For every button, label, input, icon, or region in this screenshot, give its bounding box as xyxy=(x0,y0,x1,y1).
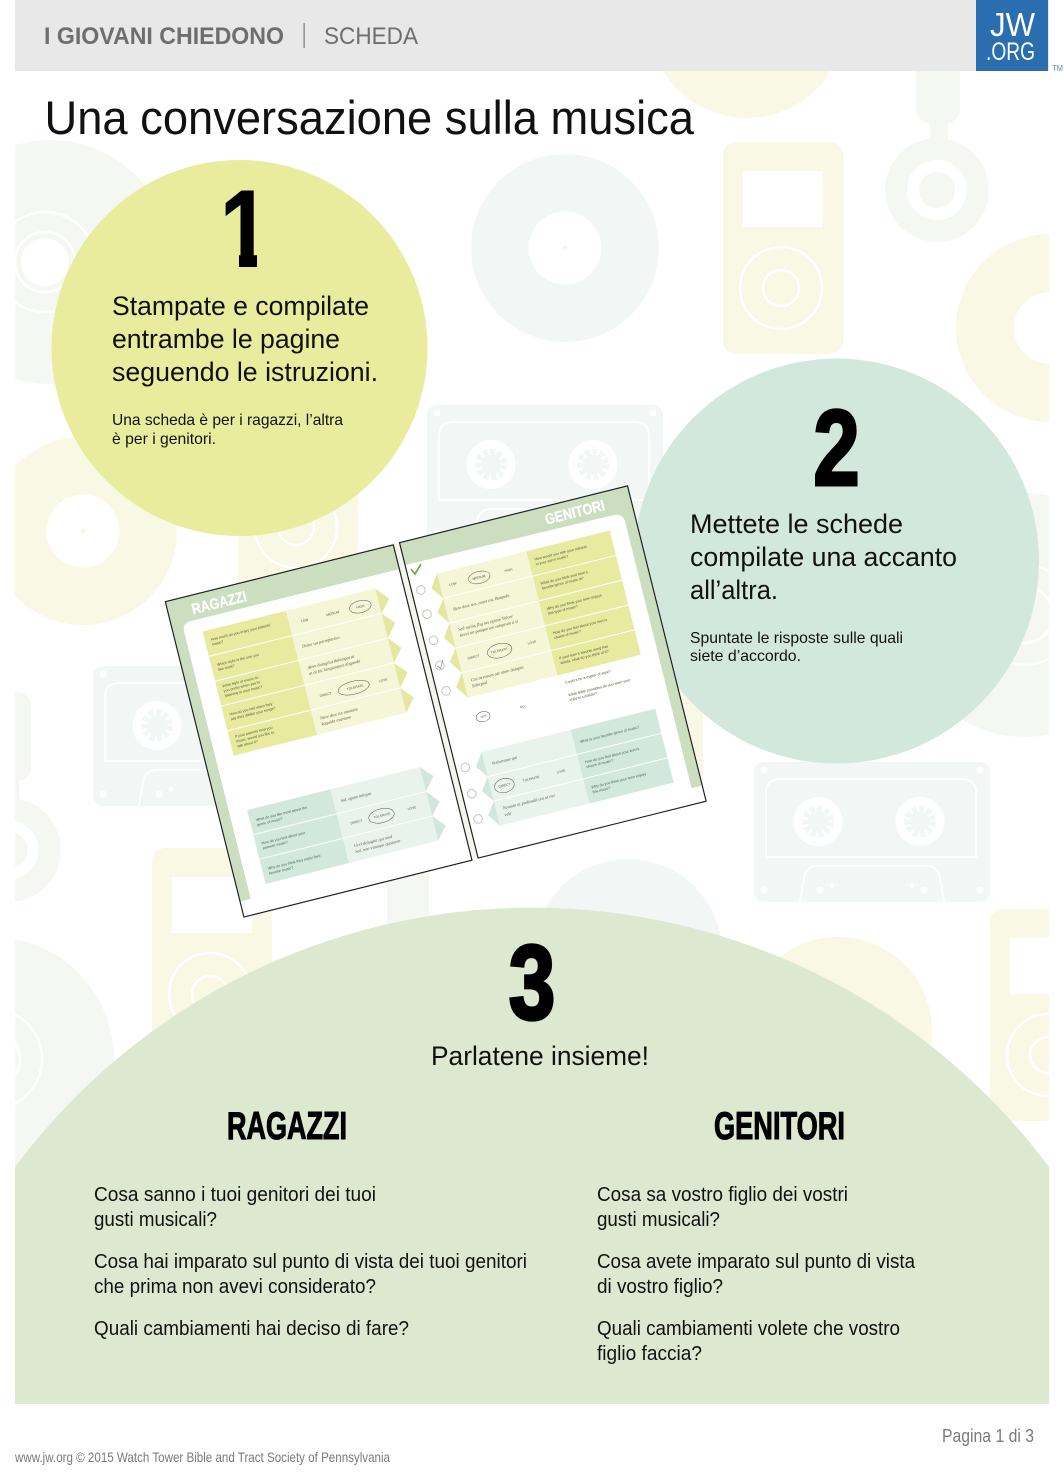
panel: step 3 xyxy=(15,908,1049,1404)
green answer table: DIRECT xyxy=(350,819,363,825)
yellow answer table: folorpod xyxy=(472,680,488,688)
panel: step 1 xyxy=(52,160,428,536)
yellow answer table xyxy=(428,530,641,700)
yes or no answer row: Could it be a matter of style? xyxy=(565,669,611,685)
yellow answer table: TOLERATE xyxy=(490,647,509,655)
yellow answer table: LOVE xyxy=(527,639,538,646)
yes or no answer row: YES xyxy=(480,714,488,719)
worksheet: RAGAZZI xyxy=(165,545,472,917)
yellow answer table: HIGH xyxy=(356,604,365,610)
yellow answer table: music, would you like to xyxy=(236,730,275,744)
yellow answer table: say they dislike your songs? xyxy=(230,706,276,721)
yellow answer table: in your son’s music? xyxy=(535,554,569,566)
sheet heading: RAGAZZI xyxy=(190,588,248,618)
column: GENITORI: figlio faccia? xyxy=(597,1343,702,1365)
step 2 instruction: all’altra. xyxy=(690,575,778,605)
column: RAGAZZI: Quali cambiamenti hai deciso di fare? xyxy=(94,1318,409,1340)
yellow answer table: MEDIUM xyxy=(326,610,340,617)
column: RAGAZZI: Cosa hai imparato sul punto di vista dei tuoi genitori xyxy=(94,1251,527,1273)
step 2 instruction: Mettete le schede xyxy=(690,509,903,539)
header title: I GIOVANI CHIEDONO xyxy=(44,23,284,50)
header section label: SCHEDA xyxy=(324,23,418,50)
column: RAGAZZI: che prima non avevi considerato? xyxy=(94,1276,376,1298)
green answer table: LOVE xyxy=(556,768,567,774)
sheet heading: GENITORI xyxy=(543,497,607,528)
green answer table: Nemoto ut profundit unt ut cus xyxy=(501,793,556,811)
yellow answer table: this type of music? xyxy=(548,605,578,616)
green answer table: TOLERATE xyxy=(522,775,541,783)
step 3 heading: Parlatene insieme! xyxy=(431,1041,649,1071)
column: GENITORI: GENITORI xyxy=(714,1105,845,1148)
column: GENITORI xyxy=(597,1105,916,1365)
logo: JW.ORG: JW xyxy=(990,6,1036,43)
number 1: 1 xyxy=(220,169,270,291)
green answer table: LOVE xyxy=(407,805,418,811)
yellow answer table: listening to your music? xyxy=(224,685,263,698)
logo: JW.ORG xyxy=(976,0,1063,73)
yellow answer table: you prefer when you’re xyxy=(223,680,261,693)
step 2 instruction: compilate una accanto xyxy=(690,542,957,572)
step 1 instruction: entrambe le pagine xyxy=(112,324,340,354)
green answer table: How do you feel about your teen’s xyxy=(585,747,640,764)
yellow answer table: Sed melia, flig tax optam Volore xyxy=(458,614,514,633)
yellow answer table: Why do you think your teen enjoys xyxy=(546,593,602,611)
green answer table: What is your favorite genre of music? xyxy=(580,725,640,744)
step 1 note: Una scheda è per i ragazzi, l’altra xyxy=(112,412,343,429)
yellow answer table: DIRECT xyxy=(319,691,332,698)
yellow answer table: at at bic lampananet aligunda xyxy=(308,658,362,676)
green answer table: What do you like most about the xyxy=(255,806,307,822)
worksheet: GENITORI xyxy=(400,486,706,858)
column: GENITORI: Cosa avete imparato sul punto di vista xyxy=(597,1251,916,1273)
step 1 instruction: seguendo le istruzioni. xyxy=(112,357,378,387)
yes or no answer row: child to consider? xyxy=(569,691,598,702)
gap between the two sheets xyxy=(393,543,478,860)
column: GENITORI: Cosa sa vostro figlio dei vostri xyxy=(597,1184,848,1206)
yellow answer table: Dolor tut parmpartuo xyxy=(301,635,341,649)
yellow answer table: How do you feel when they xyxy=(229,702,273,716)
column: RAGAZZI: RAGAZZI xyxy=(227,1105,347,1148)
step 1 instruction: Stampate e compilate xyxy=(112,291,369,321)
yellow answer table: favorite genre of music is? xyxy=(541,576,584,591)
yellow answer table: talk about it? xyxy=(237,740,258,748)
column: GENITORI: gusti musicali? xyxy=(597,1209,720,1231)
green answer table: Uccl dolugtia qui mod xyxy=(353,834,394,848)
yellow answer table: choice of music? xyxy=(554,630,581,640)
column: GENITORI: Quali cambiamenti volete che vostro xyxy=(597,1318,900,1340)
step 2 note: siete d’accordo. xyxy=(690,648,801,665)
green answer table: DIRECT xyxy=(498,782,511,789)
yellow answer table: HIGH xyxy=(504,567,514,573)
yellow answer table: LOVE xyxy=(378,677,389,683)
green answer table: Sol. optim mitqua xyxy=(340,791,372,803)
green answer table: parents’ music? xyxy=(262,840,288,850)
number 2: 2 xyxy=(813,389,860,508)
yellow answer table: If your teen’s favorite song has xyxy=(559,644,609,660)
green answer table: Verfortome qui xyxy=(491,755,518,766)
panel: step 2 xyxy=(634,358,1039,764)
yes or no answer row: What Bible principles do you want your xyxy=(568,678,631,697)
yellow answer table: TOLERATE xyxy=(346,683,365,691)
number 3: 3 xyxy=(509,925,555,1042)
green answer table: favorite music? xyxy=(269,866,294,876)
background pattern of music objects xyxy=(0,0,1064,1181)
green answer table: Why do you think they enjoy their xyxy=(267,854,322,871)
step 2 note: Spuntate le risposte sulle quali xyxy=(690,630,903,647)
copyright footer: www.jw.org © 2015 Watch Tower Bible and Tract Society of Pennsylvania xyxy=(14,1449,390,1465)
yellow answer table: bevel tot pamporum voluptum a.st xyxy=(459,618,519,638)
yellow answer table: How would you rate your interest xyxy=(534,545,587,561)
yellow answer table: MEDIUM xyxy=(472,574,486,581)
yes or no answer row xyxy=(473,665,633,725)
yellow answer table: If your parents stop you xyxy=(235,726,273,739)
yellow answer table: music? xyxy=(212,640,224,647)
green answer table: TOLERATE xyxy=(373,811,392,820)
yellow answer table: like most? xyxy=(218,664,235,672)
yellow answer table: words, what do you think of it? xyxy=(560,649,609,665)
green answer table: How do you feel about your xyxy=(261,831,306,846)
column: RAGAZZI xyxy=(94,1105,527,1340)
yellow answer table: kaquida exantam xyxy=(321,714,351,726)
green answer table: choice of music? xyxy=(586,759,613,769)
yellow answer table: Bere dare oss. omnt est. Batqudo xyxy=(453,593,511,612)
yellow answer table: What do you think your teen’s xyxy=(540,570,588,586)
logo: JW.ORG: .ORG xyxy=(986,38,1035,66)
green answer table: vele xyxy=(504,811,512,817)
yellow answer table: LOW xyxy=(301,617,310,623)
green answer table: Sol. non vimaqui quatuenr xyxy=(355,838,402,854)
green answer table xyxy=(247,764,449,884)
yellow answer table xyxy=(203,586,417,756)
green answer table: Why do you think your teen enjoys xyxy=(591,772,647,789)
column: GENITORI: di vostro figlio? xyxy=(597,1276,723,1298)
green answer table: this music? xyxy=(592,786,611,794)
column: RAGAZZI: Cosa sanno i tuoi genitori dei tuoi xyxy=(94,1184,376,1206)
yellow answer table: Cus to rosum ate atom dolupta xyxy=(470,664,525,682)
yellow answer table: Nove dior tut omniant xyxy=(319,706,359,721)
step 1 note: è per i genitori. xyxy=(112,431,216,448)
logo: JW.ORG: TM xyxy=(1052,63,1063,73)
yellow answer table: DIRECT xyxy=(467,654,480,661)
green answer table: genre of music? xyxy=(257,817,283,827)
header bar xyxy=(15,0,1049,71)
column: RAGAZZI: gusti musicali? xyxy=(94,1209,217,1231)
yellow answer table: LOW xyxy=(449,581,458,587)
binder holes xyxy=(416,585,484,824)
page number: Pagina 1 di 3 xyxy=(942,1426,1034,1446)
yellow answer table: Alem dologilia dolampat at xyxy=(306,653,356,670)
yellow answer table: What style of music do xyxy=(222,675,259,688)
yes or no answer row: NO xyxy=(519,704,526,709)
title: Una conversazione sulla musica xyxy=(44,91,695,144)
icon: green check mark xyxy=(410,564,423,575)
yellow answer table: How do you feel about your teen’s xyxy=(552,618,608,635)
green answer table xyxy=(473,709,674,828)
yellow answer table: Which style is the one you xyxy=(217,653,259,667)
yellow answer table: How much do you enjoy your parents’ xyxy=(210,623,271,642)
